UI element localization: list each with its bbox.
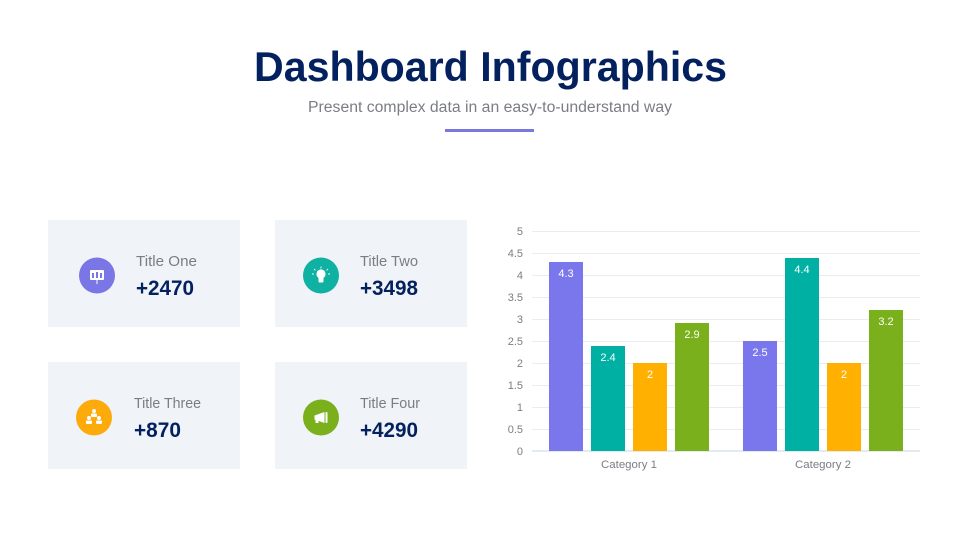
bar chart [508, 226, 920, 471]
y axis labels: 4.5 [508, 248, 523, 260]
y axis labels [508, 226, 523, 458]
card label: title four: Title Four [360, 395, 420, 412]
y axis labels: 5 [517, 226, 523, 238]
x axis labels [601, 459, 851, 471]
card value: 870: +870 [134, 419, 181, 442]
panel: title four card [275, 362, 467, 469]
card label: title one: Title One [136, 253, 197, 270]
y axis labels: 2.5 [508, 336, 523, 348]
card label: title two: Title Two [360, 253, 418, 270]
bar value labels: 2.4 [600, 352, 616, 364]
card value: 2470: +2470 [136, 277, 194, 300]
icon: presentation board [79, 258, 115, 294]
bar value labels: 2.9 [684, 329, 700, 341]
panel: title one card [48, 220, 240, 327]
bars: category 2 [743, 258, 903, 451]
y axis labels: 4 [517, 270, 523, 282]
bar value labels: 4.3 [558, 268, 574, 280]
x axis labels: Category 2 [795, 459, 851, 471]
card value: 4290: +4290 [360, 419, 418, 442]
icon: hierarchy of people [76, 400, 112, 436]
y axis labels: 0.5 [508, 424, 523, 436]
panel: title two card [275, 220, 467, 327]
y axis labels: 0 [517, 446, 523, 458]
icon: megaphone [303, 400, 339, 436]
bar value labels: 2 [647, 369, 653, 381]
card label: title three: Title Three [134, 395, 201, 412]
title underline accent [445, 129, 534, 132]
subtitle: Present complex data in an easy-to-understand way [308, 99, 672, 116]
bar value labels: 2.5 [752, 347, 768, 359]
y axis labels: 3.5 [508, 292, 523, 304]
x axis labels: Category 1 [601, 459, 657, 471]
bar value labels [558, 264, 894, 381]
icon: light bulb [303, 258, 339, 294]
y axis labels: 3 [517, 314, 523, 326]
y axis labels: 1.5 [508, 380, 523, 392]
bars: category 1 [549, 262, 709, 451]
y axis labels: 1 [517, 402, 523, 414]
bar value labels: 2 [841, 369, 847, 381]
title: Dashboard Infographics [254, 43, 727, 90]
panel: title three card [48, 362, 240, 469]
y axis labels: 2 [517, 358, 523, 370]
card value: 3498: +3498 [360, 277, 418, 300]
bar value labels: 3.2 [878, 316, 894, 328]
bar value labels: 4.4 [794, 264, 810, 276]
